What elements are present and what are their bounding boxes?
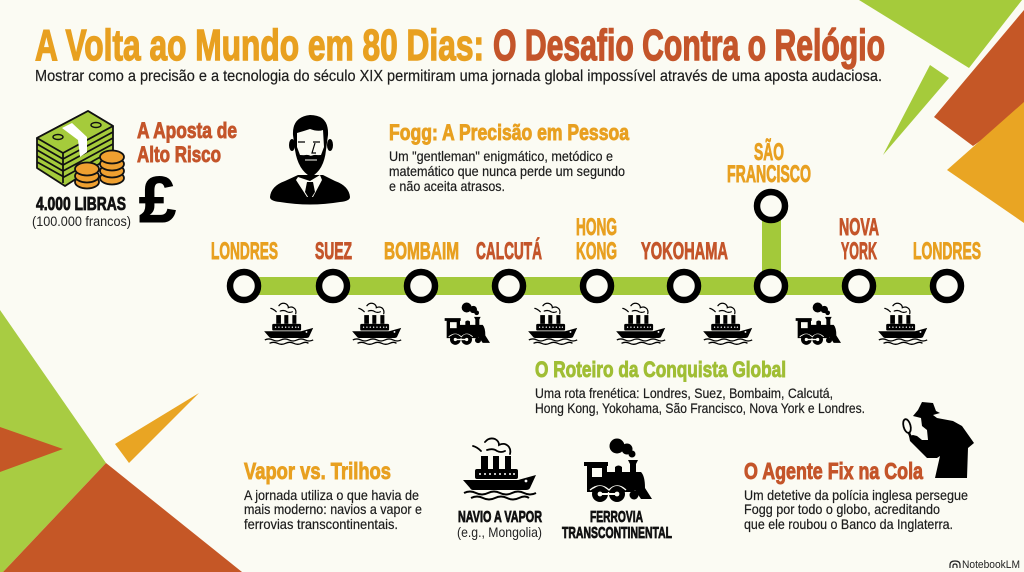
panel: fogg bbox=[389, 120, 630, 194]
text: 4.000 libras: (100.000 francos) bbox=[32, 213, 131, 229]
text: roteiro description bbox=[535, 385, 865, 416]
city labels: FRANCISCO bbox=[727, 161, 811, 188]
city labels: SUEZ bbox=[315, 238, 352, 265]
icon: locomotive: FERROVIA bbox=[590, 509, 643, 526]
text: roteiro description: Hong Kong, Yokohama, São Francisco, Nova York e Londres. bbox=[535, 400, 865, 416]
text: fogg description: e não aceita atrasos. bbox=[389, 178, 505, 194]
text: vapor description bbox=[244, 487, 422, 532]
city labels: BOMBAIM bbox=[384, 238, 459, 265]
icon: steamship bbox=[457, 438, 542, 540]
text: fix description: que ele roubou o Banco da Inglaterra. bbox=[744, 516, 953, 532]
heading: a aposta de alto risco: Alto Risco bbox=[137, 142, 221, 167]
decorative shapes: top right bbox=[859, 0, 1024, 223]
panel: roteiro bbox=[535, 357, 865, 416]
panel: agente fix bbox=[744, 458, 968, 532]
text: fix description: Um detetive da polícia inglesa persegue bbox=[744, 487, 968, 503]
city labels: YORK bbox=[841, 238, 877, 265]
text: fogg description: Um "gentleman" enigmático, metódico e bbox=[389, 148, 613, 164]
city labels: NOVA bbox=[839, 214, 879, 241]
heading: agente fix: O Agente Fix na Cola bbox=[744, 458, 923, 484]
text: roteiro description: Uma rota frenética: Londres, Suez, Bombaim, Calcutá, bbox=[535, 385, 833, 401]
city labels: KONG bbox=[576, 238, 617, 265]
title: A Volta ao Mundo em 80 Dias: bbox=[35, 21, 484, 70]
text: vapor description: ferrovias transcontinentais. bbox=[244, 516, 398, 532]
icon: fogg portrait bbox=[270, 115, 350, 204]
route line bbox=[244, 206, 947, 295]
text: fogg description bbox=[389, 148, 625, 194]
icon: steamship: (e.g., Mongolia) bbox=[457, 524, 542, 540]
heading: vapor vs trilhos: Vapor vs. Trilhos bbox=[244, 458, 391, 484]
city labels: LONDRES bbox=[211, 238, 278, 265]
text: fix description bbox=[744, 487, 968, 532]
text: 4.000 libras bbox=[32, 194, 131, 229]
icon: pound sign: £ bbox=[139, 163, 176, 236]
text: vapor description: mais moderno: navios a vapor e bbox=[244, 501, 422, 517]
city labels: SÃO bbox=[754, 138, 784, 166]
transport icons bbox=[264, 302, 927, 345]
panel: vapor vs trilhos bbox=[244, 458, 422, 532]
icon: money stack and coins bbox=[37, 111, 124, 188]
city labels bbox=[211, 138, 981, 265]
text: fix description: Fogg por todo o globo, acreditando bbox=[744, 501, 940, 517]
text: fogg description: matemático que nunca perde um segundo bbox=[389, 163, 625, 179]
subtitle: Mostrar como a precisão e a tecnologia do século XIX permitiram uma jornada global impossível através de uma aposta audaciosa. bbox=[35, 68, 882, 85]
heading: fogg: Fogg: A Precisão em Pessoa bbox=[389, 120, 630, 145]
heading: a aposta de alto risco bbox=[137, 118, 237, 167]
icon: detective bbox=[902, 402, 974, 478]
city labels: YOKOHAMA bbox=[641, 238, 728, 265]
text: 4.000 libras: 4.000 LIBRAS bbox=[36, 194, 126, 214]
panel: a aposta bbox=[32, 111, 237, 236]
icon: locomotive: TRANSCONTINENTAL bbox=[562, 525, 672, 542]
notebooklm badge: NotebookLM bbox=[962, 559, 1020, 571]
icon: steamship: NAVIO A VAPOR bbox=[458, 509, 542, 526]
timeline route bbox=[211, 138, 981, 345]
route stops bbox=[230, 192, 961, 300]
heading: roteiro: O Roteiro da Conquista Global bbox=[535, 357, 786, 382]
decorative shapes: bottom left bbox=[0, 310, 242, 572]
text: vapor description: A jornada utiliza o que havia de bbox=[244, 487, 419, 503]
city labels: CALCUTÁ bbox=[476, 237, 542, 265]
city labels: HONG bbox=[576, 214, 617, 241]
heading: a aposta de alto risco: A Aposta de bbox=[137, 118, 237, 143]
icon: locomotive bbox=[562, 438, 672, 542]
